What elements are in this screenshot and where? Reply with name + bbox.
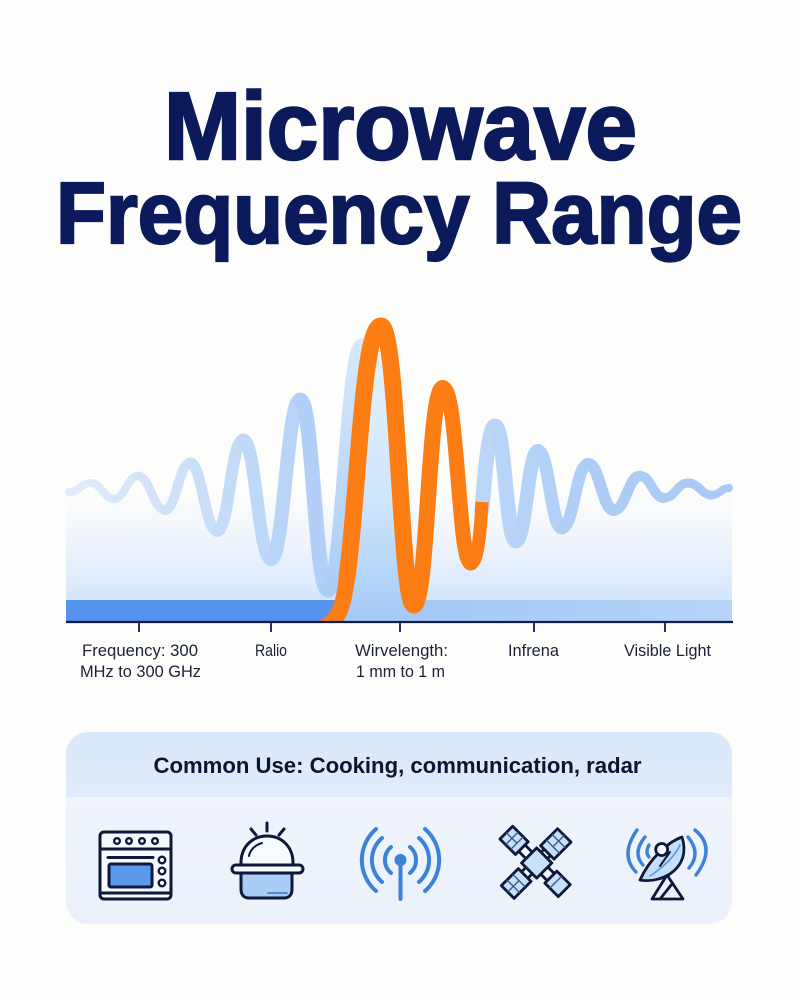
icon: satellite [477,805,592,920]
icon: oven [100,832,171,899]
axis labels [80,642,711,681]
panel body [66,732,732,924]
blue wave: right side [482,426,729,541]
axis labels: MHz to 300 GHz [80,663,201,681]
chart area gradient [66,490,732,602]
axis labels: Wirvelength: [355,642,448,660]
spectrum band: lower frequencies [66,600,338,621]
panel heading: Common Use: Cooking, communication, radar [154,753,642,778]
icon: radar dish [628,830,706,899]
icon: covered dish [232,823,303,898]
spectrum band: higher frequencies [338,600,732,621]
axis labels: Ralio [255,642,287,660]
spectrum chart [66,326,733,681]
axis labels: Visible Light [624,642,711,660]
orange microwave wave [316,326,482,621]
blue wave: left side [69,346,372,590]
title: Microwave [164,73,637,180]
central bell highlight [343,340,412,621]
axis labels: Infrena [508,642,560,660]
axis labels: 1 mm to 1 m [356,663,445,681]
title [56,73,742,262]
axis with ticks [66,622,733,632]
axis labels: Frequency: 300 [82,642,198,660]
panel header band [66,732,732,797]
icon: antenna signal [362,829,439,899]
title: Frequency Range [56,165,742,262]
panel: common uses [66,732,732,924]
